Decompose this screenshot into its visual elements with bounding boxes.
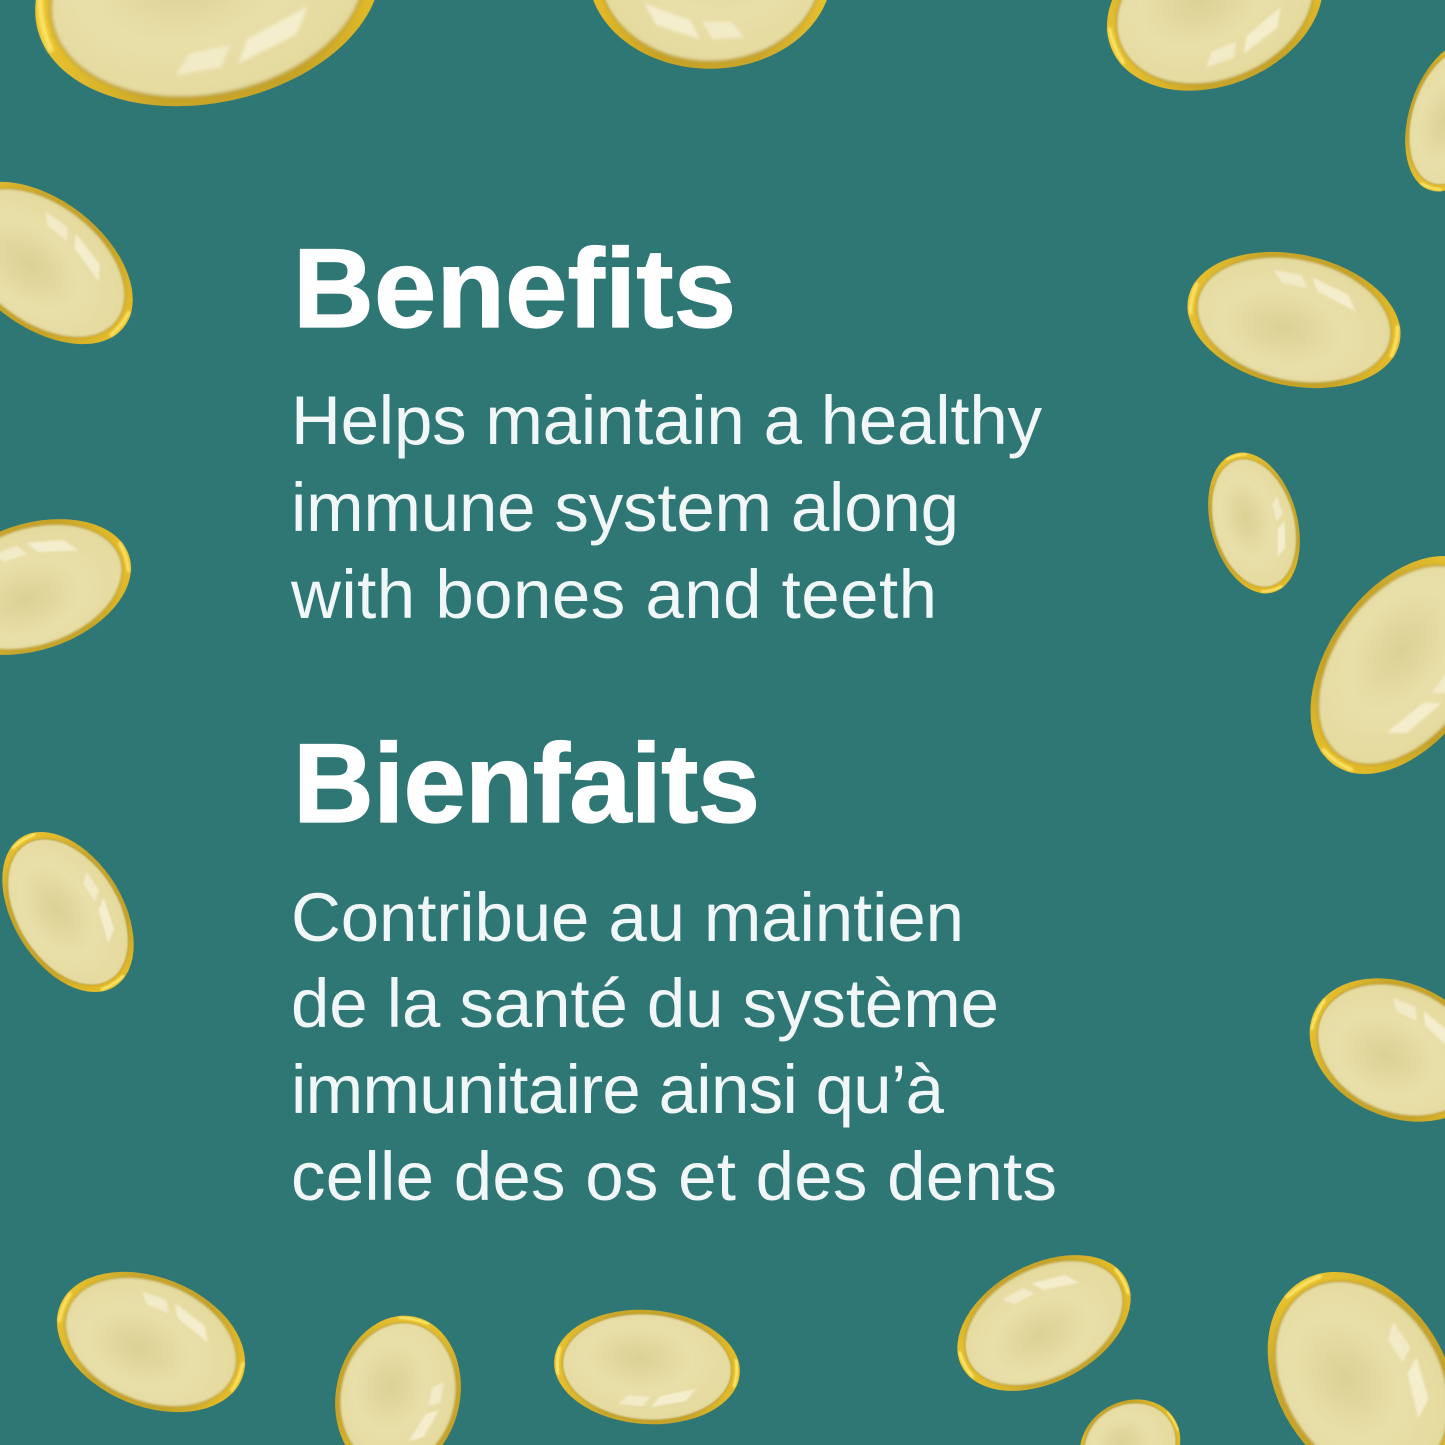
capsule: top right [1081, 0, 1349, 122]
capsule: right edge top [1387, 28, 1445, 204]
text block: French benefits: immunitaire ainsi qu’à [291, 1051, 945, 1128]
text block: French benefits: Contribue au maintien [291, 879, 964, 956]
text block: French benefits [291, 879, 1057, 1215]
capsule: right middle large [1272, 522, 1445, 808]
heading: Bienfaits: Bienfaits [293, 721, 760, 846]
text block: English benefits [290, 382, 1042, 633]
capsule: bottom centre [550, 1304, 744, 1430]
capsule: left middle [0, 495, 149, 679]
capsule: left upper [0, 149, 163, 377]
text block: English benefits: Helps maintain a healthy [291, 382, 1042, 459]
capsule: left lower [0, 808, 161, 1016]
capsule: bottom left [36, 1246, 266, 1438]
capsule: bottom small cut off [1063, 1381, 1197, 1445]
capsule: bottom right [934, 1227, 1154, 1419]
capsule: bottom corner large [1229, 1237, 1445, 1445]
capsule: right upper [1175, 233, 1413, 407]
heading: Benefits: Benefits [293, 226, 736, 351]
capsule: top left [13, 0, 403, 137]
text block: English benefits: with bones and teeth [290, 556, 937, 633]
capsule: top centre [588, 0, 832, 69]
text block: French benefits: de la santé du système [291, 965, 999, 1042]
capsule: right lower [1287, 951, 1445, 1149]
capsule: right small [1193, 442, 1315, 604]
text block: French benefits: celle des os et des dents [291, 1138, 1057, 1215]
capsule: bottom second [321, 1304, 475, 1445]
text block: English benefits: immune system along [291, 469, 959, 546]
